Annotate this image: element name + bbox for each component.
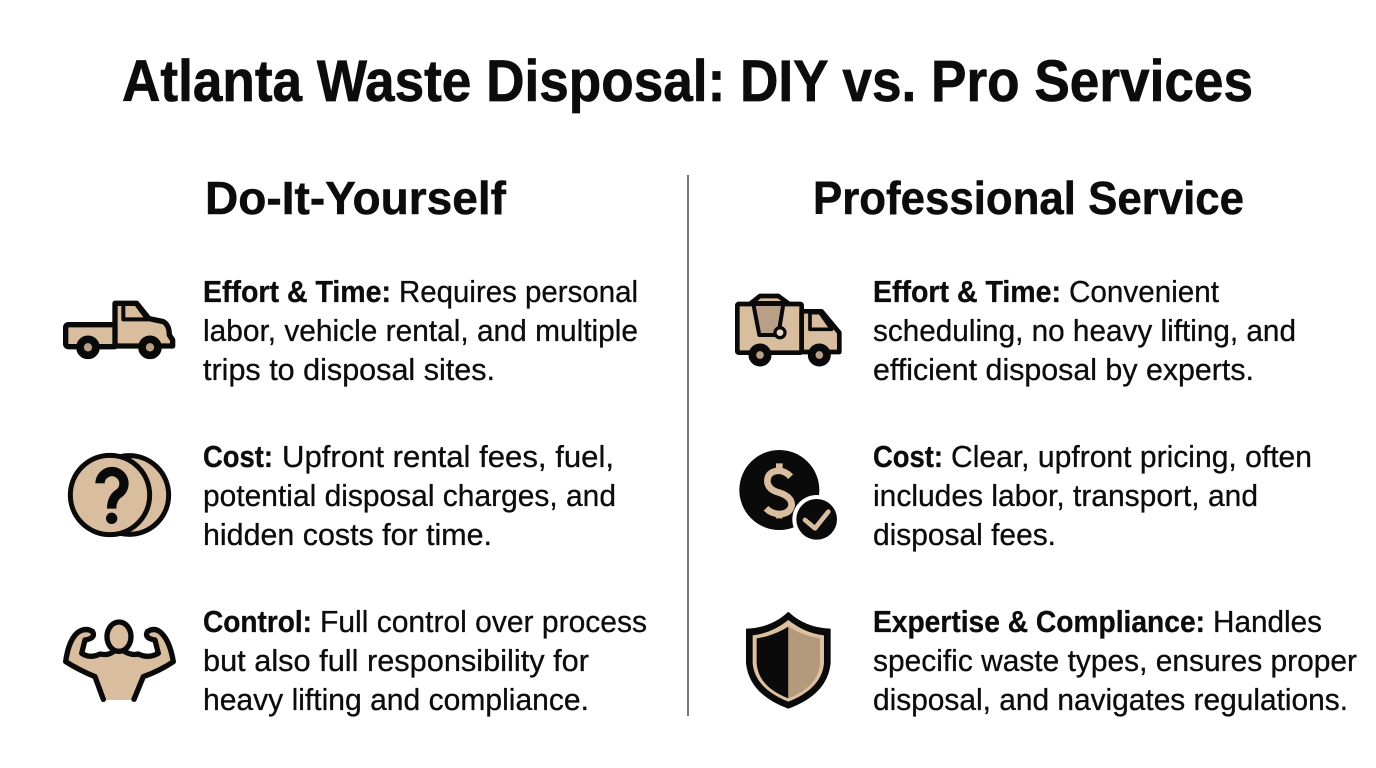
- title: Atlanta Waste Disposal: DIY vs. Pro Services: [122, 49, 1253, 114]
- heading: do-it-yourself: Do-It-Yourself: [205, 172, 507, 224]
- text: pro cost: Clear, upfront pricing, often: [951, 439, 1312, 474]
- text: pro cost: Cost:: [873, 439, 943, 474]
- text: pro expertise and compliance: Expertise & Compliance:: [873, 604, 1205, 639]
- text: pro expertise and compliance: disposal, and navigates regulations.: [873, 682, 1348, 717]
- text: DIY cost: Cost:: [203, 439, 273, 474]
- text: DIY control: [203, 604, 647, 717]
- panel: do-it-yourself: [66, 172, 647, 717]
- text: DIY cost: [203, 439, 616, 552]
- text: DIY control: heavy lifting and compliance.: [203, 682, 589, 717]
- icon: coin with question mark: [70, 455, 169, 535]
- text: pro cost: disposal fees.: [873, 517, 1056, 552]
- icon: pickup truck: [66, 303, 173, 355]
- text: DIY effort and time: trips to disposal sites.: [203, 352, 495, 387]
- text: pro effort and time: [873, 274, 1296, 387]
- text: pro cost: includes labor, transport, and: [873, 478, 1258, 513]
- icon: flexing figure: [66, 622, 173, 700]
- text: DIY effort and time: Requires personal: [399, 274, 638, 309]
- text: DIY control: Control:: [203, 604, 312, 639]
- text: DIY cost: Upfront rental fees, fuel,: [282, 439, 614, 474]
- icon: dollar with check badge: [739, 450, 841, 544]
- text: pro expertise and compliance: specific waste types, ensures proper: [873, 643, 1357, 678]
- text: pro cost: [873, 439, 1312, 552]
- text: DIY cost: potential disposal charges, and: [203, 478, 616, 513]
- text: DIY effort and time: labor, vehicle rental, and multiple: [203, 313, 638, 348]
- text: DIY control: Full control over process: [320, 604, 647, 639]
- text: pro expertise and compliance: [873, 604, 1357, 717]
- panel: professional service: [737, 172, 1357, 717]
- text: pro effort and time: scheduling, no heavy lifting, and: [873, 313, 1296, 348]
- text: pro effort and time: Convenient: [1069, 274, 1219, 309]
- icon: waste collection truck: [737, 296, 839, 363]
- heading: professional service: Professional Service: [813, 172, 1244, 224]
- text: DIY control: but also full responsibility for: [203, 643, 589, 678]
- text: DIY effort and time: Effort & Time:: [203, 274, 391, 309]
- text: DIY effort and time: [203, 274, 638, 387]
- icon: shield: [747, 613, 830, 708]
- text: DIY cost: hidden costs for time.: [203, 517, 492, 552]
- text: pro effort and time: efficient disposal by experts.: [873, 352, 1254, 387]
- text: pro effort and time: Effort & Time:: [873, 274, 1061, 309]
- text: pro expertise and compliance: Handles: [1213, 604, 1322, 639]
